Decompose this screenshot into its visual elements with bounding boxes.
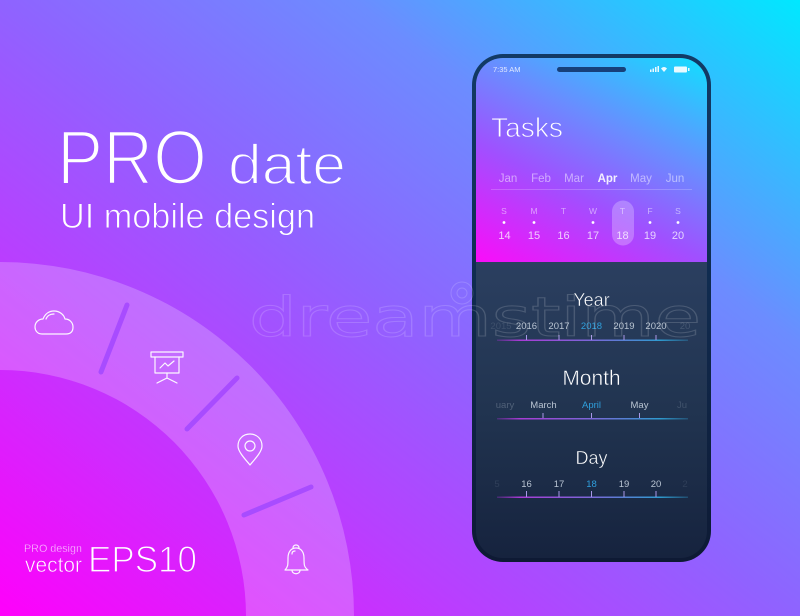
- picker: day: [494, 448, 688, 498]
- month row: [499, 173, 684, 185]
- picker: year: 20: [680, 321, 690, 332]
- picker: day: Day: [575, 448, 608, 468]
- picker: year: Year: [573, 290, 610, 310]
- weekday letters: [502, 208, 680, 214]
- day numbers: 20: [672, 230, 684, 242]
- icon: bell: [285, 545, 308, 574]
- month row: Jun: [666, 173, 684, 185]
- day numbers: 16: [557, 230, 570, 242]
- picker: day: 2: [682, 479, 688, 490]
- picker: year: 2017: [548, 321, 570, 332]
- month row: May: [630, 173, 652, 185]
- picker: year: 2016: [516, 321, 537, 332]
- panel: tasks header: [476, 58, 707, 262]
- bottom label: PRO design vector EPS10: [24, 539, 197, 580]
- bottom label: PRO design vector EPS10: vector: [25, 554, 82, 577]
- weekday letters: T: [620, 206, 625, 216]
- watermark: dreamstime: [249, 286, 701, 349]
- day numbers: 15: [528, 230, 540, 242]
- weekday letters: T: [561, 206, 566, 216]
- picker: month: Ju: [677, 400, 687, 411]
- ring divider 3: [244, 487, 311, 515]
- speaker notch: [557, 67, 626, 72]
- status icons: [650, 66, 690, 72]
- picker: year: 2015: [490, 321, 512, 332]
- month row: Feb: [531, 173, 551, 185]
- day numbers: 18: [616, 230, 629, 242]
- picker: month: May: [631, 400, 649, 411]
- weekday letters: S: [675, 206, 681, 216]
- picker: month: March: [530, 400, 557, 411]
- phone frame: [472, 54, 711, 562]
- day numbers: 17: [587, 230, 599, 242]
- phone mockup: [472, 54, 711, 562]
- day numbers: 19: [644, 230, 656, 242]
- picker: day: 5: [494, 479, 500, 490]
- selected day pill: [612, 200, 634, 246]
- picker: day: 17: [554, 479, 564, 490]
- heading: Tasks: Tasks: [491, 112, 563, 143]
- picker: year: 2018: [581, 321, 602, 332]
- picker: month: April: [582, 400, 601, 411]
- picker: year: [490, 290, 690, 341]
- month row: Apr: [598, 173, 618, 185]
- weekday letters: W: [589, 206, 597, 216]
- ring divider 1: [101, 305, 127, 372]
- status bar time: 7:35 AM: [493, 65, 521, 74]
- icon: map pin: [238, 434, 262, 465]
- month row: Mar: [564, 173, 584, 185]
- picker: day: 19: [619, 479, 629, 490]
- weekday letters: F: [647, 206, 653, 216]
- picker: month: Month: [562, 367, 621, 390]
- title: PRO date: date: [228, 133, 346, 197]
- picker: day: 20: [651, 479, 661, 490]
- panel: date pickers: [476, 262, 707, 558]
- title: PRO date: [57, 115, 346, 201]
- picker: year: 2020: [645, 321, 667, 332]
- weekday letters: M: [530, 206, 538, 216]
- event dots: [503, 221, 679, 224]
- icon: presentation board: [151, 352, 183, 383]
- picker: day: 16: [521, 479, 532, 490]
- picker: month: [496, 367, 688, 420]
- ring divider 2: [187, 378, 237, 429]
- weekday letters: S: [501, 206, 507, 216]
- arc menu ring: [0, 262, 354, 616]
- picker: month: uary: [496, 400, 514, 411]
- icon: cloud: [35, 311, 73, 334]
- bottom label: PRO design vector EPS10: EPS10: [88, 539, 197, 580]
- day numbers: [499, 232, 684, 239]
- watermark: [249, 282, 701, 349]
- picker: day: 18: [586, 479, 597, 490]
- bottom label: PRO design vector EPS10: PRO design: [24, 543, 82, 555]
- day numbers: 14: [498, 230, 511, 242]
- phone screen: [476, 58, 707, 558]
- title: PRO date: PRO: [57, 115, 207, 201]
- subtitle: UI mobile design: [60, 197, 315, 236]
- month row: Jan: [499, 173, 517, 185]
- picker: year: 2019: [613, 321, 635, 332]
